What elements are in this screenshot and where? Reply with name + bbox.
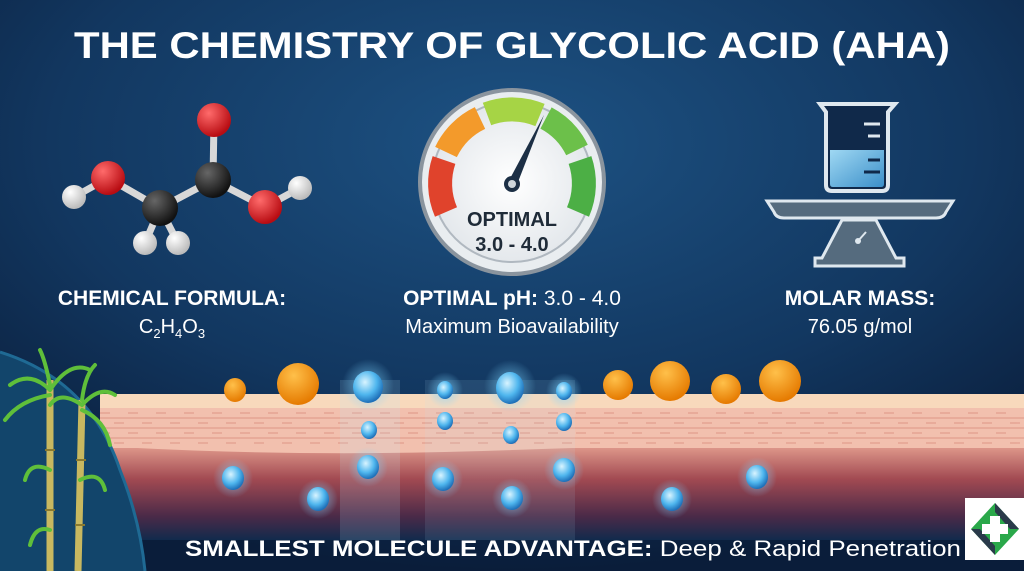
label: chemical formula: CHEMICAL FORMULA: (58, 287, 286, 310)
molecules: large orange (blocked) (224, 360, 801, 405)
icon: molecule (62, 103, 312, 255)
icon: beaker on scale (767, 104, 953, 266)
label: molar mass (785, 287, 935, 338)
label: chemical formula: O (182, 316, 198, 338)
logo (965, 498, 1024, 560)
molecules: glycolic acid (penetrating) (213, 359, 777, 519)
label: chemical formula: 2 (153, 326, 161, 341)
footer text: SMALLEST MOLECULE ADVANTAGE: Deep & Rapid Penetration (185, 536, 961, 561)
label: molar mass: 76.05 g/mol (808, 316, 912, 338)
label: optimal pH (403, 287, 621, 338)
label: optimal pH: OPTIMAL pH: 3.0 - 4.0 (403, 287, 621, 310)
label: chemical formula: C (139, 316, 153, 338)
title: THE CHEMISTRY OF GLYCOLIC ACID (AHA) (74, 25, 950, 66)
icon: pH gauge (418, 88, 606, 276)
label: chemical formula: 3 (198, 326, 205, 341)
icon: pH gauge: OPTIMAL (467, 209, 557, 231)
sugarcane panel (0, 350, 145, 571)
icon: pH gauge: 3.0 - 4.0 (475, 234, 549, 256)
label: molar mass: MOLAR MASS: (785, 287, 935, 310)
label: chemical formula (58, 287, 286, 341)
label: chemical formula: 4 (175, 326, 182, 341)
label: chemical formula: H (161, 316, 175, 338)
skin cross-section (100, 380, 1024, 540)
label: optimal pH: Maximum Bioavailability (405, 316, 619, 338)
